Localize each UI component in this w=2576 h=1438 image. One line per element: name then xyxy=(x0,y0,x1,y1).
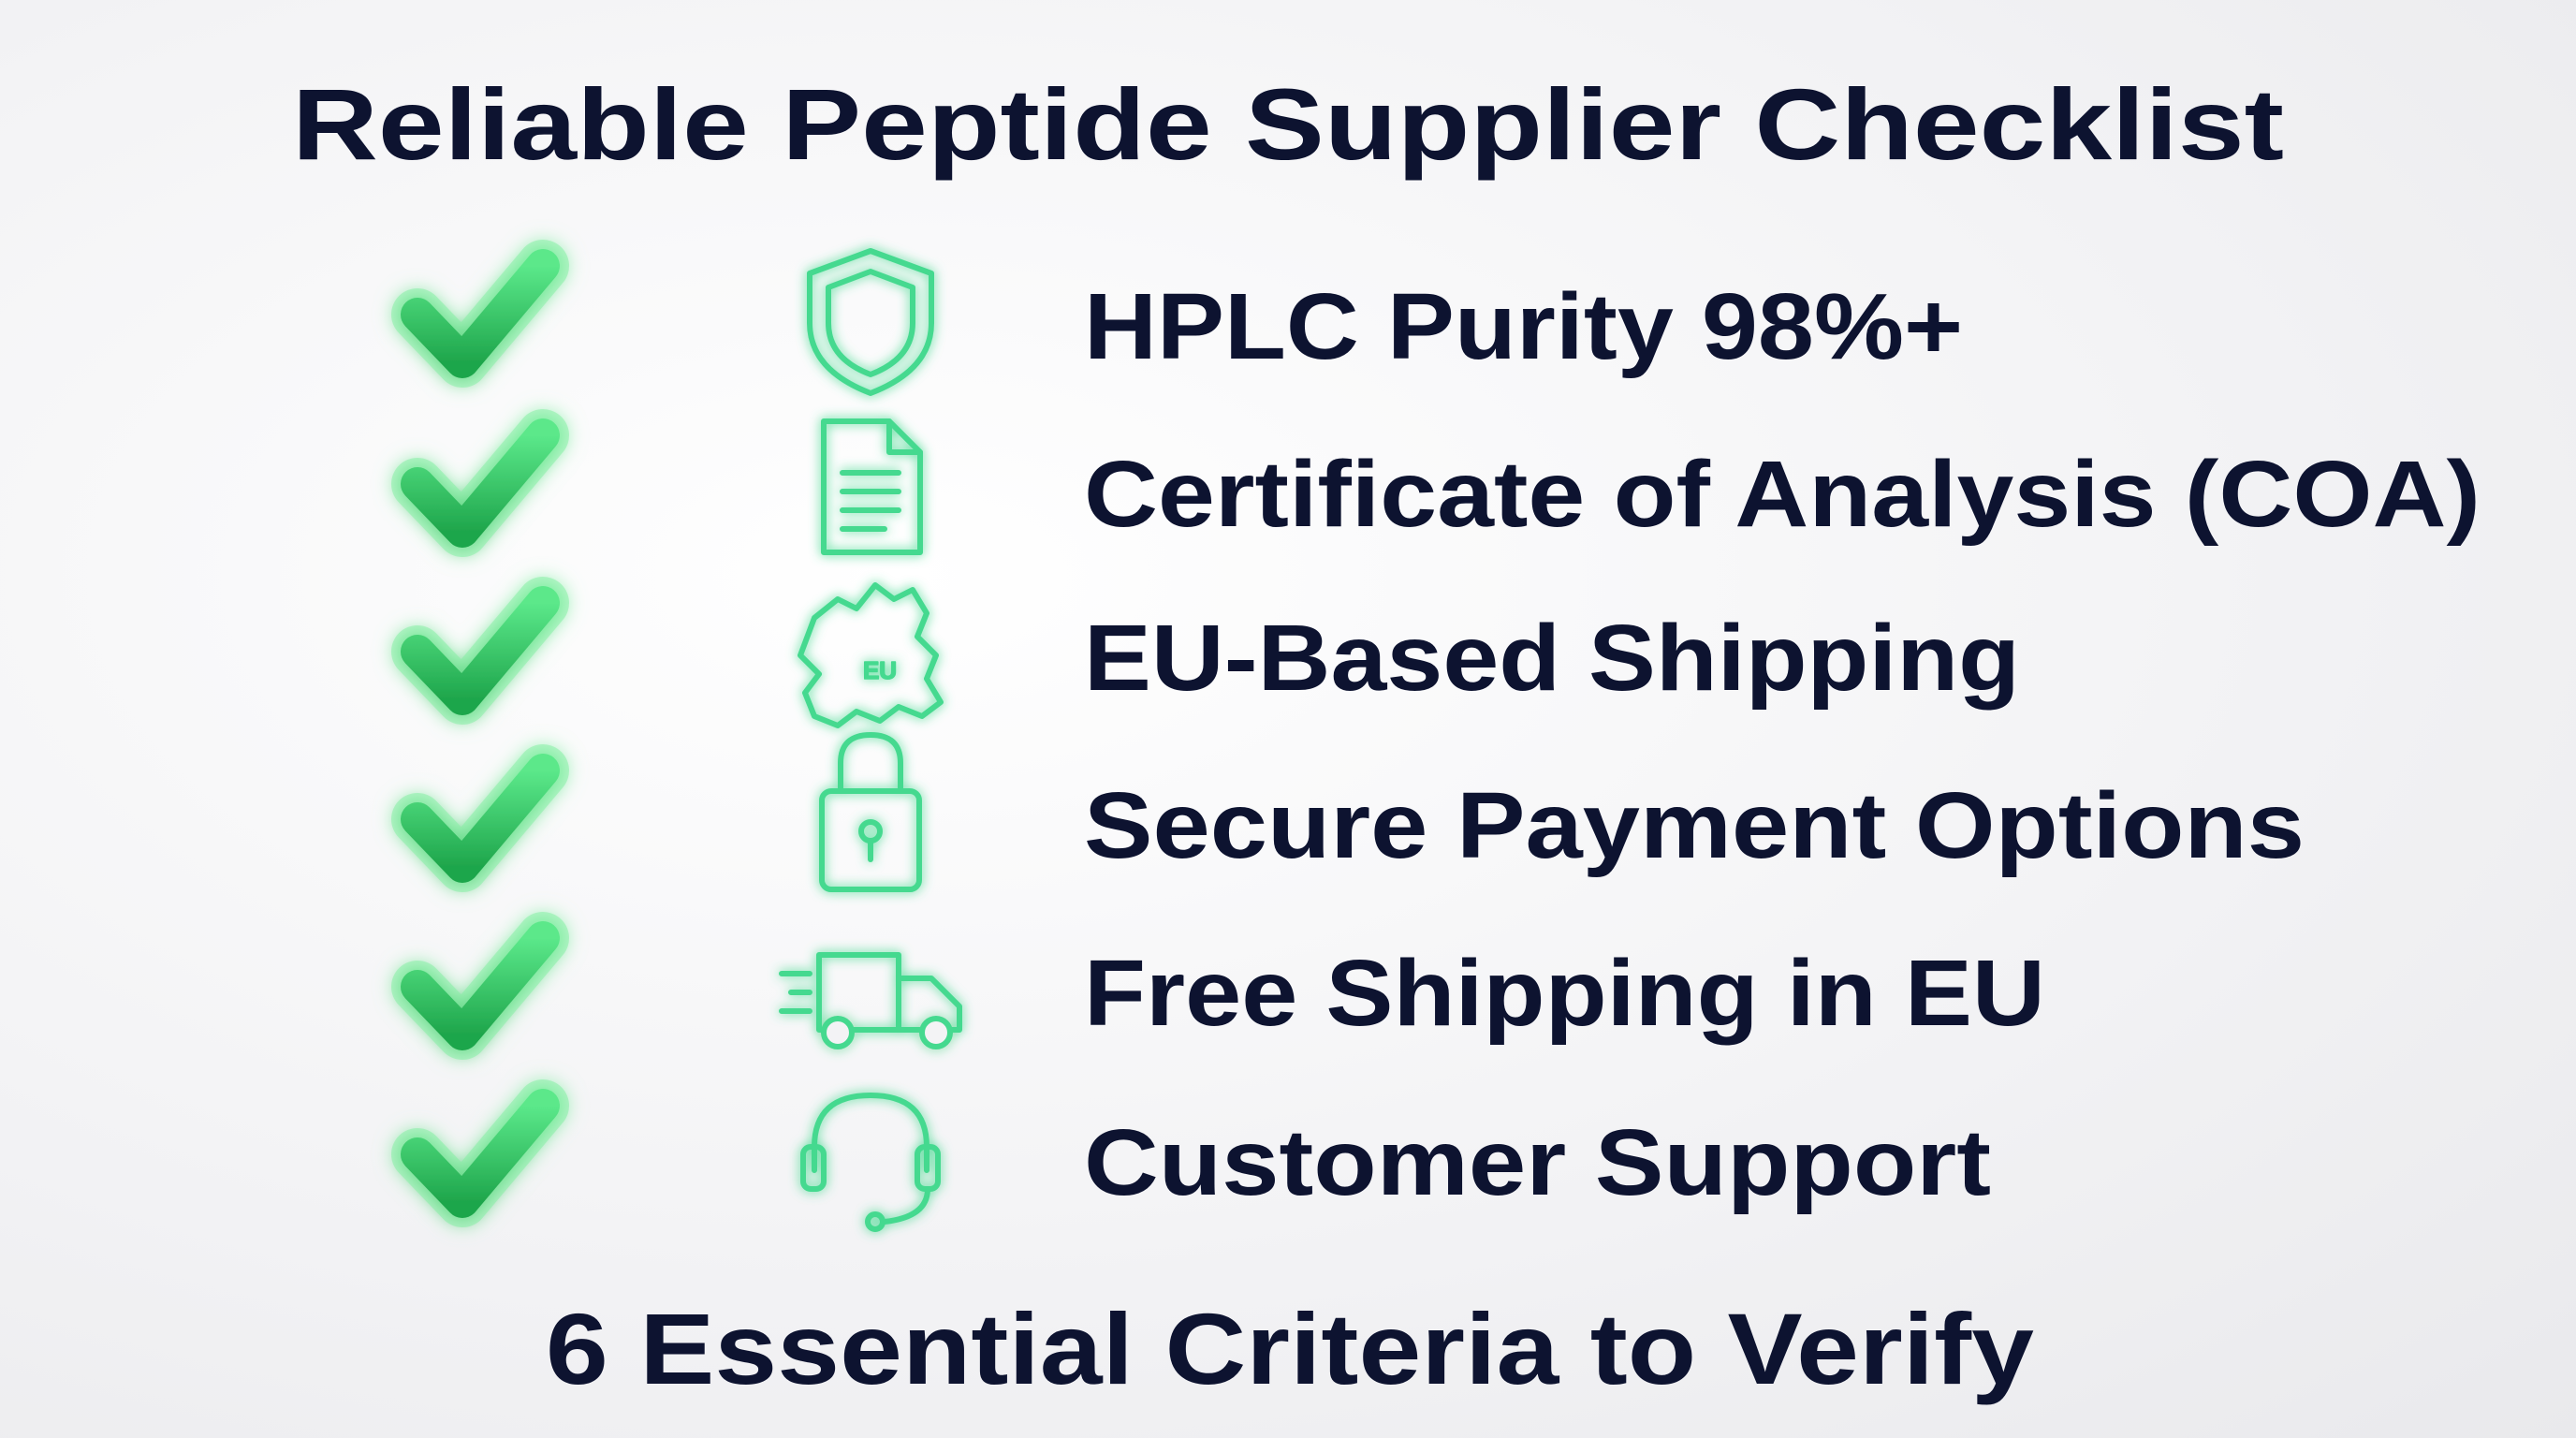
icon: truck xyxy=(782,955,959,1047)
icon: document xyxy=(824,421,920,552)
label: payment: Secure Payment Options xyxy=(1084,773,2305,878)
icon: EU map xyxy=(800,585,941,726)
icon: padlock xyxy=(822,735,919,889)
checkmarks column xyxy=(417,266,543,1201)
label: free shipping: Free Shipping in EU xyxy=(1084,941,2045,1046)
icon: shield xyxy=(810,251,931,393)
label: COA: Certificate of Analysis (COA) xyxy=(1084,442,2481,547)
icon: EU map: EU xyxy=(863,656,897,684)
checklist labels xyxy=(1084,274,2481,1215)
title: Reliable Peptide Supplier Checklist xyxy=(292,67,2284,181)
label: support: Customer Support xyxy=(1084,1110,1991,1215)
footer subtitle: 6 Essential Criteria to Verify xyxy=(546,1292,2034,1405)
icons column xyxy=(782,251,959,1229)
icon: headset xyxy=(803,1095,938,1229)
label: EU shipping: EU-Based Shipping xyxy=(1084,606,2020,711)
label: HPLC: HPLC Purity 98%+ xyxy=(1084,274,1963,379)
